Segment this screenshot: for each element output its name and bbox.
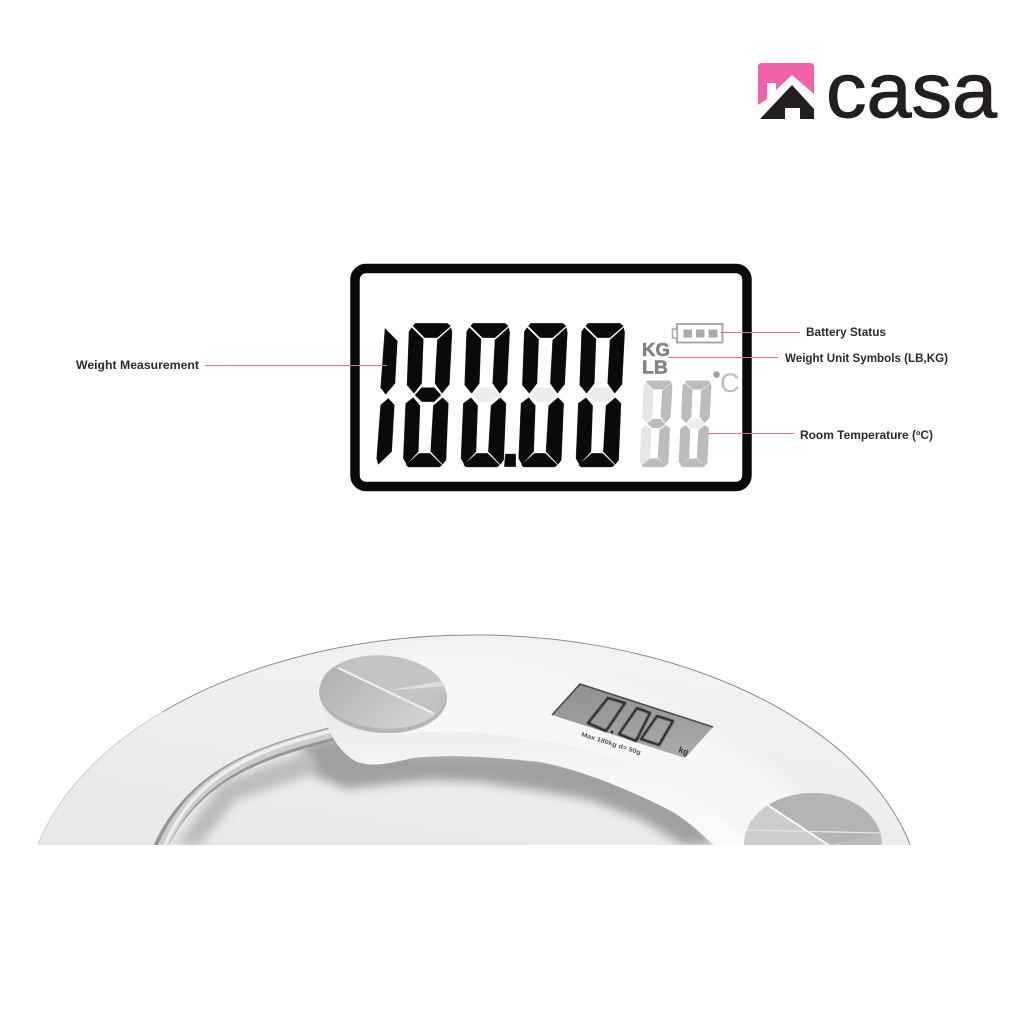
weight reading 180.00	[377, 323, 625, 467]
digit 1	[377, 328, 397, 464]
wordmark: casa	[826, 46, 998, 134]
LCD decimal point	[611, 731, 613, 733]
digit 0	[461, 323, 510, 467]
soft highlight above body	[669, 782, 778, 836]
panel: LCD display enlargement	[355, 268, 747, 486]
degree dot	[713, 371, 720, 378]
product photo: glass scale	[38, 635, 910, 850]
shadow under body	[300, 735, 716, 845]
shadow of tube	[176, 750, 318, 845]
unit symbols	[642, 339, 670, 378]
right metal disk	[744, 793, 882, 845]
glass plate	[38, 635, 910, 845]
capacity label: Max 180kg d= 50g	[580, 731, 642, 757]
digit 3	[640, 381, 672, 467]
scale LCD screen	[552, 684, 713, 758]
logo: casa	[758, 46, 998, 134]
celsius symbol: C	[720, 368, 740, 398]
icon: pink square with house	[758, 63, 814, 119]
glass rim	[163, 635, 910, 845]
temperature reading 30	[640, 381, 711, 467]
body front face	[322, 705, 752, 845]
digit 0	[519, 323, 567, 467]
digit 0	[679, 381, 711, 467]
display frame	[355, 268, 747, 486]
LCD reading 0.00	[588, 698, 673, 745]
callout: weight measurement: Weight Measurement	[76, 360, 199, 372]
left metal disk	[319, 655, 447, 734]
unit symbols: KG	[642, 339, 670, 360]
callout: weight unit symbols: Weight Unit Symbols (LB,KG)	[785, 353, 948, 365]
digit 8	[403, 323, 452, 467]
glass rim, faint lower left	[38, 712, 163, 845]
icon: battery	[672, 324, 722, 342]
unit symbols: LB	[642, 356, 668, 378]
LCD unit kg: kg	[677, 744, 690, 757]
digit 0	[576, 323, 625, 467]
decimal point	[504, 454, 516, 467]
callout: battery status: Battery Status	[806, 327, 886, 339]
steel tube	[160, 730, 335, 848]
callout: room temperature: Room Temperature (ºC)	[800, 430, 933, 442]
